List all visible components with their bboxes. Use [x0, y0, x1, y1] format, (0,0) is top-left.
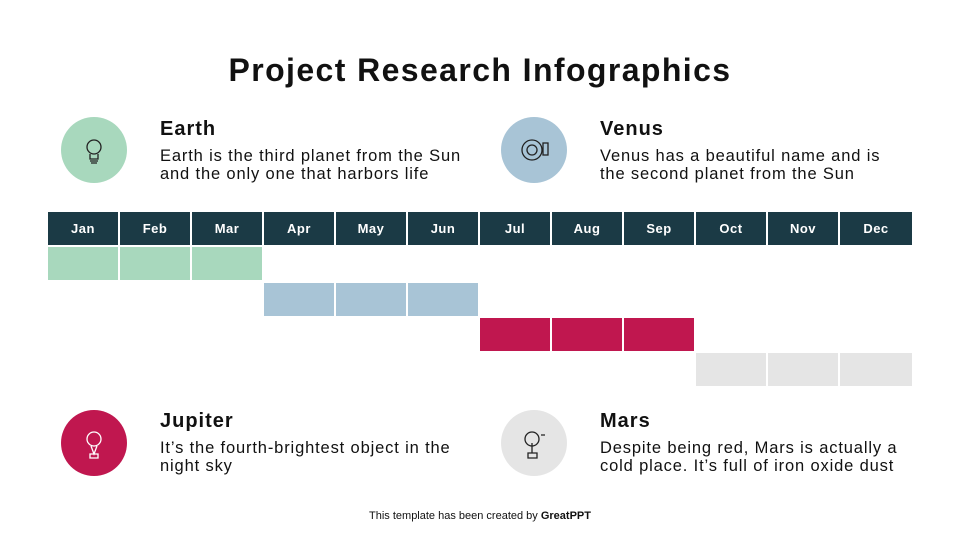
icon: Mars	[501, 410, 567, 476]
text: Jupiter: night sky	[160, 457, 233, 475]
text: Mars: Mars	[600, 410, 651, 432]
gantt chart	[48, 212, 912, 386]
gantt chart: Jul	[505, 221, 525, 236]
text: Earth: Earth is the third planet from the Sun	[160, 147, 461, 165]
text: Earth: and the only one that harbors life	[160, 165, 429, 183]
text: Venus	[600, 118, 880, 183]
text: Mars	[600, 410, 897, 475]
text: Jupiter: It’s the fourth-brightest object in the	[160, 439, 451, 457]
text: Venus: Venus has a beautiful name and is	[600, 147, 880, 165]
gantt chart: Sep	[646, 221, 672, 236]
text: Jupiter: Jupiter	[160, 410, 234, 432]
text: Earth	[160, 118, 461, 183]
gantt chart: May	[358, 221, 384, 236]
gantt chart: Apr	[287, 221, 311, 236]
gantt chart: Nov	[790, 221, 816, 236]
icon: Earth lightbulb	[61, 117, 127, 183]
footer credit: This template has been created by GreatPPT	[369, 510, 591, 522]
gantt chart: Oct	[719, 221, 743, 236]
gantt chart: Mar	[215, 221, 239, 236]
gantt chart: Aug	[574, 221, 600, 236]
text: Mars: cold place. It’s full of iron oxide dust	[600, 457, 894, 475]
text: Venus: Venus	[600, 118, 664, 140]
icon: Venus	[501, 117, 567, 183]
gantt chart: Jun	[431, 221, 455, 236]
text: Venus: the second planet from the Sun	[600, 165, 855, 183]
title: Project Research Infographics	[228, 52, 731, 88]
gantt chart: Feb	[143, 221, 167, 236]
gantt chart: Jan	[71, 221, 95, 236]
icon: Jupiter	[61, 410, 127, 476]
text: Earth: Earth	[160, 118, 216, 140]
text: Jupiter	[160, 410, 451, 475]
text: Mars: Despite being red, Mars is actually a	[600, 439, 897, 457]
gantt chart: Dec	[863, 221, 889, 236]
